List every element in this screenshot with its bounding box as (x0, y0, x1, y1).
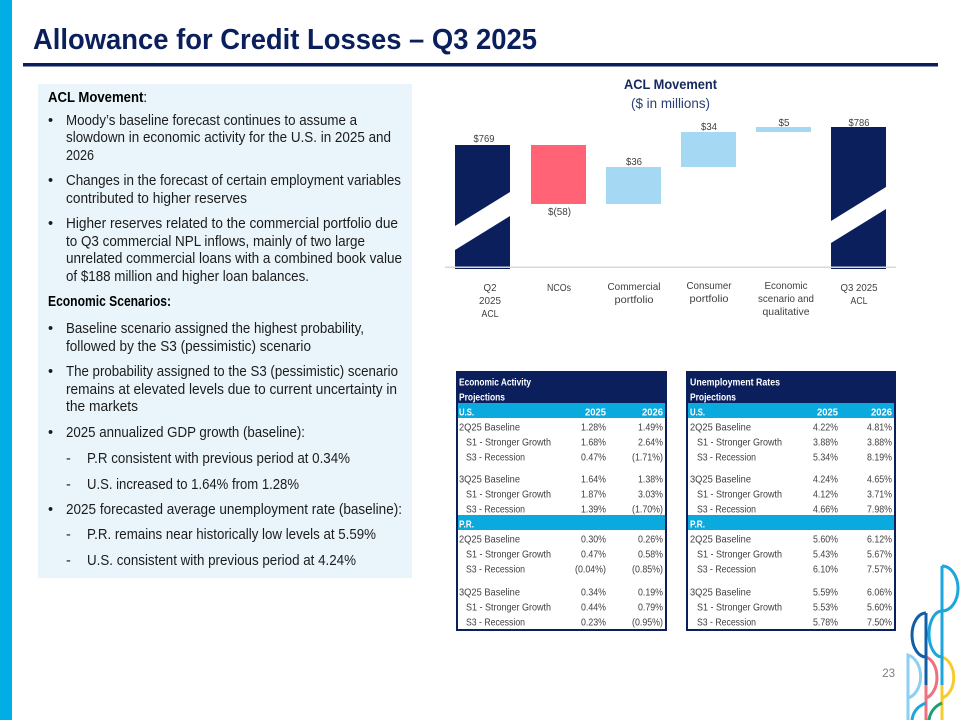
value labels: $786 (848, 117, 870, 129)
U.S. rows (690, 422, 892, 516)
category labels: Consumer (686, 280, 732, 292)
bullet: Moody's forecast: • (48, 113, 53, 129)
P.R. rows: 2Q25 Baseline (690, 534, 751, 546)
P.R. rows: 2Q25 Baseline (459, 534, 520, 546)
table header: Projections (690, 392, 736, 404)
P.R. rows: 3Q25 Baseline (690, 586, 751, 598)
bullet: commercial reserves: to Q3 commercial NPL inflows, mainly of two large (66, 234, 365, 250)
P.R. rows: 0.23% (581, 616, 606, 628)
U.S. rows: S3 - Recession (697, 452, 756, 464)
bullet: baseline scenario: • (48, 321, 53, 337)
P.R. rows: S1 - Stronger Growth (697, 548, 782, 560)
chart axis (445, 266, 896, 268)
bullet: S3 probability (48, 364, 398, 415)
table header: Unemployment Rates (690, 376, 780, 388)
P.R. rows: 0.30% (581, 534, 606, 546)
title: Allowance for Credit Losses – Q3 2025 (33, 24, 537, 56)
U.S. rows: 1.39% (581, 504, 606, 516)
P.R. rows: 5.43% (813, 548, 838, 560)
P.R. rows: 5.53% (813, 602, 838, 614)
bar: NCOs (531, 145, 586, 204)
bullet: Moody's forecast (48, 113, 391, 164)
P.R. rows (690, 534, 892, 628)
U.S. rows: 3.88% (867, 436, 892, 448)
U.S. rows: 4.65% (867, 474, 892, 486)
category labels: portfolio (690, 293, 729, 305)
value labels: $(58) (548, 206, 571, 218)
U.S. rows: 4.12% (813, 488, 838, 500)
bullet: commercial reserves: Higher reserves related to the commercial portfolio due (66, 216, 398, 232)
U.S. rows: S1 - Stronger Growth (466, 488, 551, 500)
P.R. rows: 0.79% (638, 602, 663, 614)
bar: Commercial portfolio (606, 167, 661, 204)
category labels: ACL (482, 308, 499, 320)
P.R. rows: S3 - Recession (466, 616, 525, 628)
value labels: $5 (778, 117, 790, 129)
title rule (23, 63, 938, 66)
bullet: unemployment rate: - (66, 527, 71, 543)
category labels: NCOs (547, 282, 571, 294)
bullet: commercial reserves: of $188 million and higher loan balances. (66, 269, 309, 285)
bar: Consumer portfolio (681, 132, 736, 167)
U.S. section header: 2025 (817, 406, 838, 418)
U.S. section header (458, 403, 665, 418)
P.R. rows: (0.95%) (632, 616, 663, 628)
table frame (457, 372, 666, 630)
P.R. section header (458, 515, 665, 530)
P.R. rows: 0.26% (638, 534, 663, 546)
P.R. rows: 6.12% (867, 534, 892, 546)
U.S. rows: 4.81% (867, 422, 892, 434)
U.S. rows: 1.68% (581, 436, 606, 448)
U.S. rows: 3.71% (867, 488, 892, 500)
P.R. rows: (0.85%) (632, 564, 663, 576)
P.R. rows: 5.60% (813, 534, 838, 546)
U.S. rows: 3.03% (638, 488, 663, 500)
U.S. rows: 0.47% (581, 452, 606, 464)
chart: ACL movement waterfall (445, 76, 896, 320)
panel: ACL commentary (38, 84, 412, 578)
category labels: qualitative (762, 306, 810, 318)
P.R. rows: 0.44% (581, 602, 606, 614)
P.R. rows: 3Q25 Baseline (459, 586, 520, 598)
chart title: ACL Movement (624, 76, 717, 92)
category labels: Q2 (484, 282, 497, 294)
bullet: commercial reserves: • (48, 216, 53, 232)
category labels (479, 280, 878, 320)
U.S. section header: U.S. (459, 406, 474, 418)
bullet: unemployment rate: - (66, 553, 71, 569)
bullet: employment variables: • (48, 173, 53, 189)
bullet: GDP growth: P.R consistent with previous period at 0.34% (87, 451, 350, 467)
bullet: baseline scenario: Baseline scenario assigned the highest probability, (66, 321, 364, 337)
P.R. rows: 7.57% (867, 564, 892, 576)
U.S. rows: 1.64% (581, 474, 606, 486)
category labels: ACL (850, 295, 868, 307)
category labels: Commercial (608, 281, 660, 293)
U.S. rows: 1.87% (581, 488, 606, 500)
U.S. rows: S1 - Stronger Growth (697, 436, 782, 448)
U.S. rows: (1.70%) (632, 504, 663, 516)
P.R. rows: S3 - Recession (697, 564, 756, 576)
bullet: GDP growth: 2025 annualized GDP growth (baseline): (66, 425, 305, 441)
U.S. rows: 2.64% (638, 436, 663, 448)
P.R. rows: S1 - Stronger Growth (697, 602, 782, 614)
bullet: Moody's forecast: slowdown in economic activity for the U.S. in 2025 and (66, 130, 391, 146)
P.R. rows: 5.60% (867, 602, 892, 614)
U.S. rows: 7.98% (867, 504, 892, 516)
U.S. rows (459, 422, 663, 516)
U.S. rows: 4.22% (813, 422, 838, 434)
table frame (687, 372, 895, 630)
page number: 23 (882, 668, 895, 680)
U.S. rows: 3Q25 Baseline (459, 474, 520, 486)
bullet: employment variables (48, 173, 401, 207)
category labels: Economic (764, 280, 808, 292)
bullet: Moody's forecast: Moody’s baseline forecast continues to assume a (66, 113, 358, 129)
logo: ribbon mark (908, 566, 958, 720)
U.S. rows: 1.49% (638, 422, 663, 434)
bullet: commercial reserves (48, 216, 402, 285)
bullet: unemployment rate: U.S. consistent with previous period at 4.24% (87, 553, 356, 569)
bullet: GDP growth: • (48, 425, 53, 441)
category labels: 2025 (479, 295, 501, 307)
P.R. rows: 6.10% (813, 564, 838, 576)
left accent bar (0, 0, 12, 720)
P.R. section header: P.R. (459, 518, 474, 530)
U.S. section header: 2025 (585, 406, 606, 418)
U.S. section header: 2026 (871, 406, 892, 418)
U.S. rows: 2Q25 Baseline (690, 422, 751, 434)
U.S. section header (688, 403, 894, 418)
P.R. rows: S3 - Recession (466, 564, 525, 576)
bullet: Moody's forecast: 2026 (66, 148, 94, 164)
bullet: S3 probability: remains at elevated levels due to current uncertainty in (66, 382, 397, 398)
table header (687, 372, 895, 404)
chart subtitle: ($ in millions) (631, 95, 710, 111)
P.R. rows: S1 - Stronger Growth (466, 602, 551, 614)
table header: Economic Activity (459, 376, 531, 388)
P.R. rows: S3 - Recession (697, 616, 756, 628)
category labels: Q3 2025 (840, 282, 878, 294)
U.S. section header: 2026 (642, 406, 663, 418)
category labels: scenario and (758, 293, 814, 305)
table header: Projections (459, 392, 505, 404)
P.R. rows: 0.47% (581, 548, 606, 560)
U.S. rows: 8.19% (867, 452, 892, 464)
U.S. section header: U.S. (690, 406, 705, 418)
bullet: unemployment rate (48, 502, 402, 569)
P.R. rows: 0.34% (581, 586, 606, 598)
bullet: unemployment rate: • (48, 502, 53, 518)
value labels: $36 (626, 156, 642, 168)
P.R. section header: P.R. (690, 518, 705, 530)
heading: Economic Scenarios: Economic Scenarios: (48, 294, 171, 310)
bullet: baseline scenario: followed by the S3 (pessimistic) scenario (66, 339, 311, 355)
table: Economic Activity Projections (457, 372, 666, 630)
U.S. rows: S3 - Recession (466, 504, 525, 516)
U.S. rows: 5.34% (813, 452, 838, 464)
U.S. rows: (1.71%) (632, 452, 663, 464)
U.S. rows: 4.24% (813, 474, 838, 486)
panel background (38, 84, 412, 578)
U.S. rows: S1 - Stronger Growth (697, 488, 782, 500)
U.S. rows: S3 - Recession (697, 504, 756, 516)
bullet: commercial reserves: unrelated commercial loans with a combined book value (66, 251, 402, 267)
P.R. rows: 5.67% (867, 548, 892, 560)
P.R. rows: 6.06% (867, 586, 892, 598)
bullet: S3 probability: The probability assigned to the S3 (pessimistic) scenario (66, 364, 398, 380)
bullet: GDP growth: - (66, 451, 71, 467)
bullet: unemployment rate: P.R. remains near historically low levels at 5.59% (87, 527, 376, 543)
P.R. rows: S1 - Stronger Growth (466, 548, 551, 560)
bullet: S3 probability: the markets (66, 399, 138, 415)
table header (457, 372, 666, 404)
bullet: GDP growth: - (66, 477, 71, 493)
P.R. rows: (0.04%) (575, 564, 606, 576)
bullet: employment variables: contributed to higher reserves (66, 191, 247, 207)
U.S. rows: 2Q25 Baseline (459, 422, 520, 434)
P.R. rows (459, 534, 663, 628)
value labels: $34 (701, 121, 717, 133)
bullet: unemployment rate: 2025 forecasted average unemployment rate (baseline): (66, 502, 402, 518)
bullet: S3 probability: • (48, 364, 53, 380)
U.S. rows: 3Q25 Baseline (690, 474, 751, 486)
U.S. rows: 1.28% (581, 422, 606, 434)
bullet: GDP growth (48, 425, 350, 493)
U.S. rows: 3.88% (813, 436, 838, 448)
P.R. rows: 5.78% (813, 616, 838, 628)
P.R. rows: 7.50% (867, 616, 892, 628)
bullet: baseline scenario (48, 321, 364, 355)
U.S. rows: 4.66% (813, 504, 838, 516)
bullet: employment variables: Changes in the forecast of certain employment variables (66, 173, 401, 189)
heading: ACL Movement: ACL Movement: (48, 90, 147, 106)
bar: Q3 2025 ACL (831, 127, 886, 269)
category labels: portfolio (614, 294, 654, 306)
P.R. section header (688, 515, 894, 530)
U.S. rows: 1.38% (638, 474, 663, 486)
P.R. rows: 0.19% (638, 586, 663, 598)
U.S. rows: S3 - Recession (466, 452, 525, 464)
table: Unemployment Rates Projections (687, 372, 895, 630)
bar: Economic scenario and qualitative (756, 127, 811, 132)
bullet: GDP growth: U.S. increased to 1.64% from 1.28% (87, 477, 299, 493)
bar: Q2 2025 ACL (455, 145, 510, 269)
value labels (474, 117, 870, 218)
value labels: $769 (474, 133, 495, 145)
U.S. rows: S1 - Stronger Growth (466, 436, 551, 448)
P.R. rows: 5.59% (813, 586, 838, 598)
P.R. rows: 0.58% (638, 548, 663, 560)
